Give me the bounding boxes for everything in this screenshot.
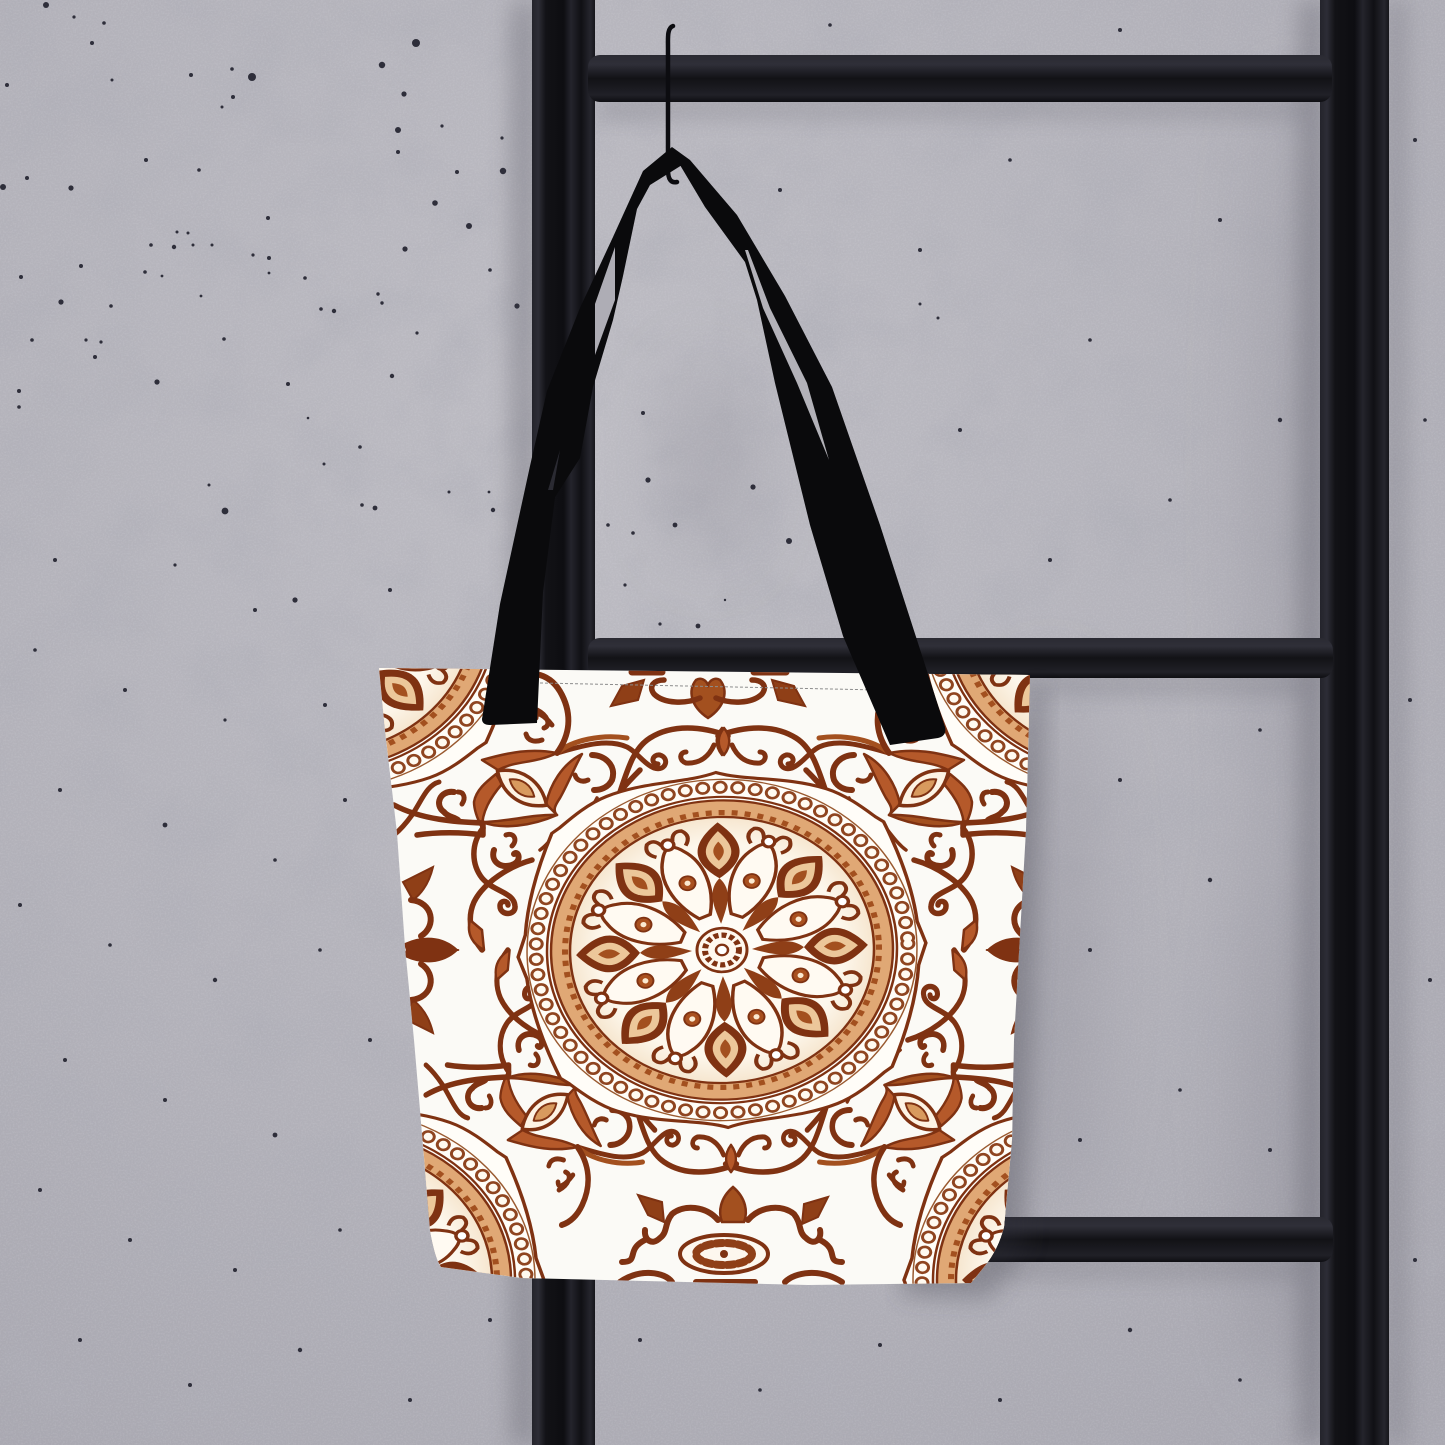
top edge crest (611, 672, 805, 718)
tote bag body (379, 668, 1030, 1285)
bag shadow (900, 690, 1045, 1298)
bottom crest with flower (620, 1187, 842, 1282)
strap: right pair (672, 147, 945, 745)
hook (668, 26, 677, 182)
right side motif (986, 865, 1024, 1035)
corner medallion: top right (928, 674, 1030, 786)
strap gap over wall (595, 247, 615, 355)
corner medallion: bottom right (902, 1116, 1012, 1284)
ladder shadow (512, 0, 1403, 1445)
strap: left pair (482, 147, 682, 725)
corner medallion: bottom left (420, 1113, 546, 1278)
corner medallion: top left (379, 668, 496, 788)
ladder right rail (1320, 0, 1389, 1445)
wall shading (670, 80, 1330, 1400)
ladder (532, 0, 1389, 1445)
central mandala (512, 765, 932, 1135)
strap gap over wall (745, 250, 829, 460)
ladder left rail (532, 0, 595, 1445)
bag fabric (370, 660, 1040, 1290)
scroll frame (394, 675, 1052, 1225)
left side motif (403, 867, 457, 1033)
strap gap over rail (548, 450, 560, 490)
top seam (540, 683, 880, 690)
ladder rungs (588, 55, 1333, 1262)
